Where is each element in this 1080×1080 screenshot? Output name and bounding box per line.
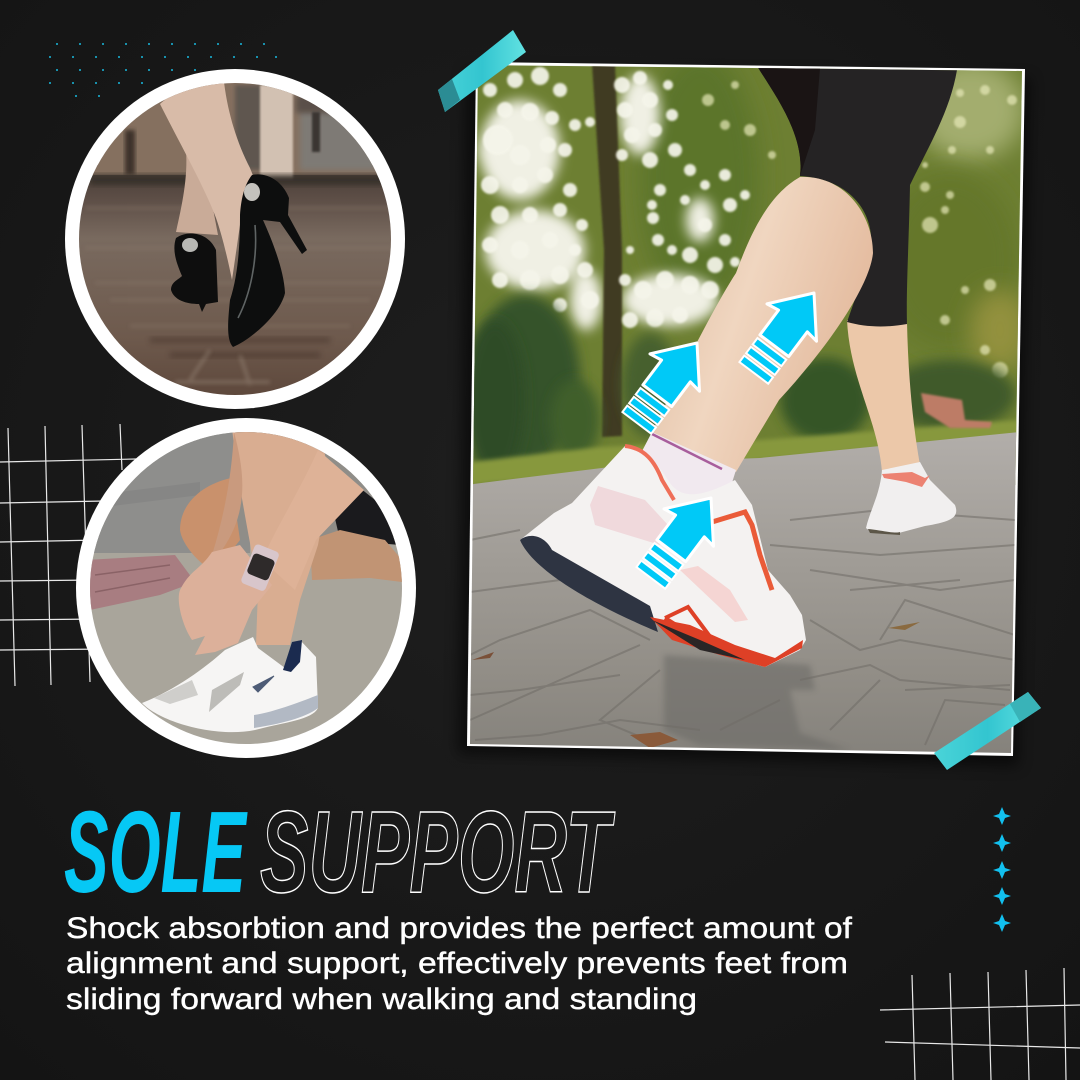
thigh behind xyxy=(180,478,240,572)
rear calf xyxy=(310,530,402,582)
room background xyxy=(92,83,378,175)
leggings xyxy=(757,66,957,326)
outsole xyxy=(520,536,658,632)
ground xyxy=(90,432,402,744)
title xyxy=(64,787,616,917)
bokeh highlights xyxy=(481,67,750,328)
tree trunk xyxy=(592,64,622,437)
pavement xyxy=(465,431,1030,760)
tree background xyxy=(460,55,1035,485)
grid decoration left xyxy=(0,424,136,686)
rear shoe xyxy=(866,462,956,534)
bench xyxy=(921,393,992,428)
dot pattern top left xyxy=(49,43,277,97)
main photo shadow xyxy=(458,70,1030,766)
left shoe xyxy=(171,234,218,312)
forearm xyxy=(320,456,364,536)
watch xyxy=(240,543,280,592)
leaves xyxy=(630,732,678,748)
title: SOLE xyxy=(64,787,248,917)
title: SUPPORT xyxy=(260,787,616,917)
front leg xyxy=(650,177,873,472)
shorts xyxy=(335,490,396,545)
paving stone cracks xyxy=(470,510,1015,745)
tape top left xyxy=(438,30,526,112)
front leg xyxy=(160,82,254,280)
photo circle: tying sneaker xyxy=(76,418,416,760)
hands xyxy=(179,545,272,655)
description text: alignment and support, effectively prevents feet from xyxy=(66,947,848,980)
photo circle: high heels xyxy=(65,69,405,410)
sparkle column xyxy=(993,807,1011,932)
pink paving xyxy=(85,555,195,610)
bright sky patches xyxy=(478,75,718,330)
tape bottom right xyxy=(934,692,1041,770)
front shoe xyxy=(228,174,307,347)
concrete steps xyxy=(94,432,250,553)
sneaker xyxy=(142,637,318,732)
pavement shadow xyxy=(664,655,850,750)
description text: Shock absorbtion and provides the perfect amount of xyxy=(66,912,853,945)
grid decoration bottom right xyxy=(880,968,1080,1080)
rear leg xyxy=(847,320,920,472)
grass xyxy=(470,420,1020,485)
description text: sliding forward when walking and standing xyxy=(66,983,697,1016)
floor xyxy=(79,165,391,395)
main photo: walker with arrows xyxy=(460,50,1035,760)
rear leg xyxy=(176,150,218,235)
sock xyxy=(642,432,736,494)
arrows xyxy=(621,342,701,435)
front shoe xyxy=(520,446,806,667)
shin xyxy=(232,428,330,645)
description text xyxy=(66,912,853,1016)
bushes xyxy=(470,295,580,465)
